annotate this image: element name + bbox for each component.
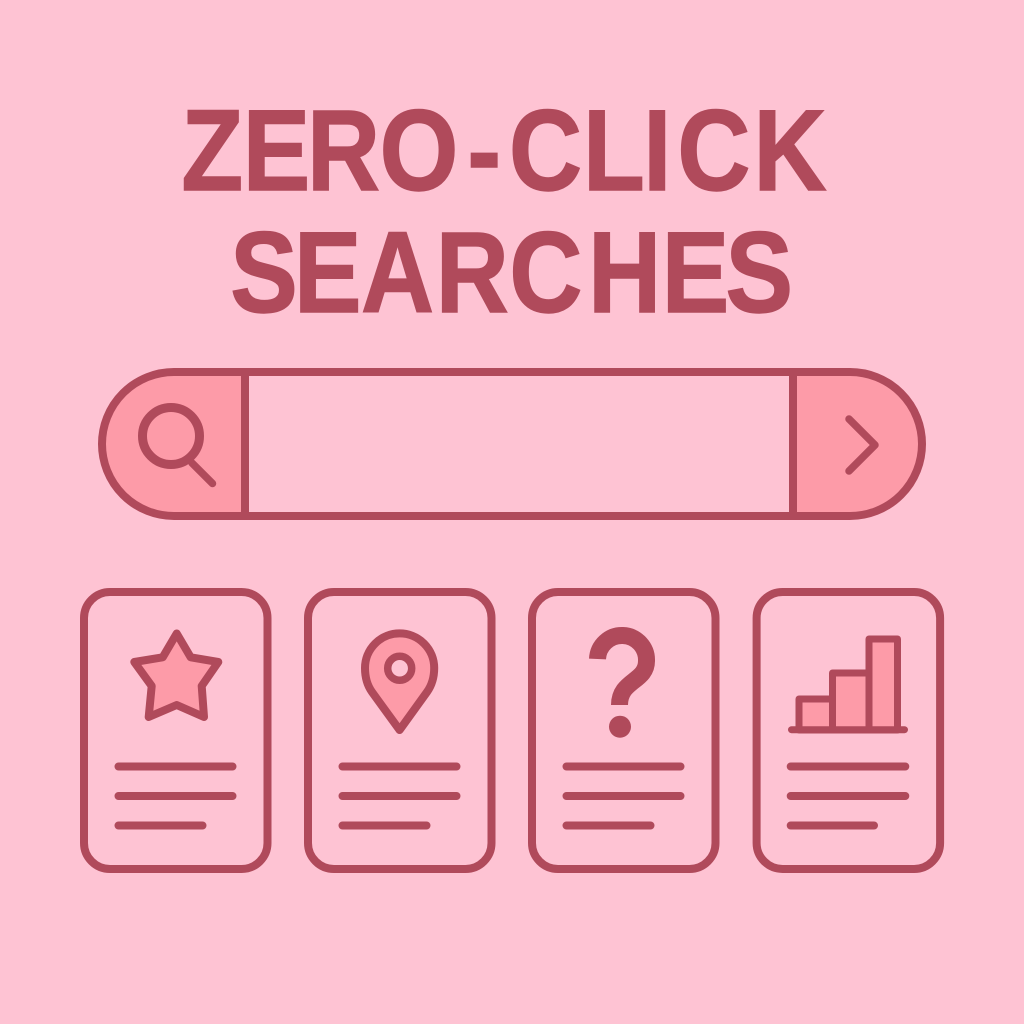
text lines	[791, 766, 905, 826]
title	[181, 86, 827, 336]
icon: bar chart	[792, 639, 904, 730]
search input	[245, 372, 793, 516]
search bar	[102, 372, 922, 516]
icon: chevron	[849, 419, 875, 471]
title: ZERO-CLICK	[181, 86, 827, 214]
card: question	[532, 592, 716, 869]
card: bar chart	[757, 592, 940, 869]
card: star	[84, 592, 268, 869]
text lines	[566, 766, 680, 826]
icon: question mark	[598, 636, 647, 738]
text lines	[342, 766, 456, 826]
icon: map pin	[365, 633, 434, 730]
title: SEARCHES	[230, 208, 793, 336]
text lines	[118, 766, 232, 826]
icon: star	[134, 634, 218, 717]
icon: magnifying glass	[142, 408, 212, 484]
go button	[793, 372, 922, 516]
card: location	[308, 592, 492, 869]
search button	[102, 372, 245, 516]
